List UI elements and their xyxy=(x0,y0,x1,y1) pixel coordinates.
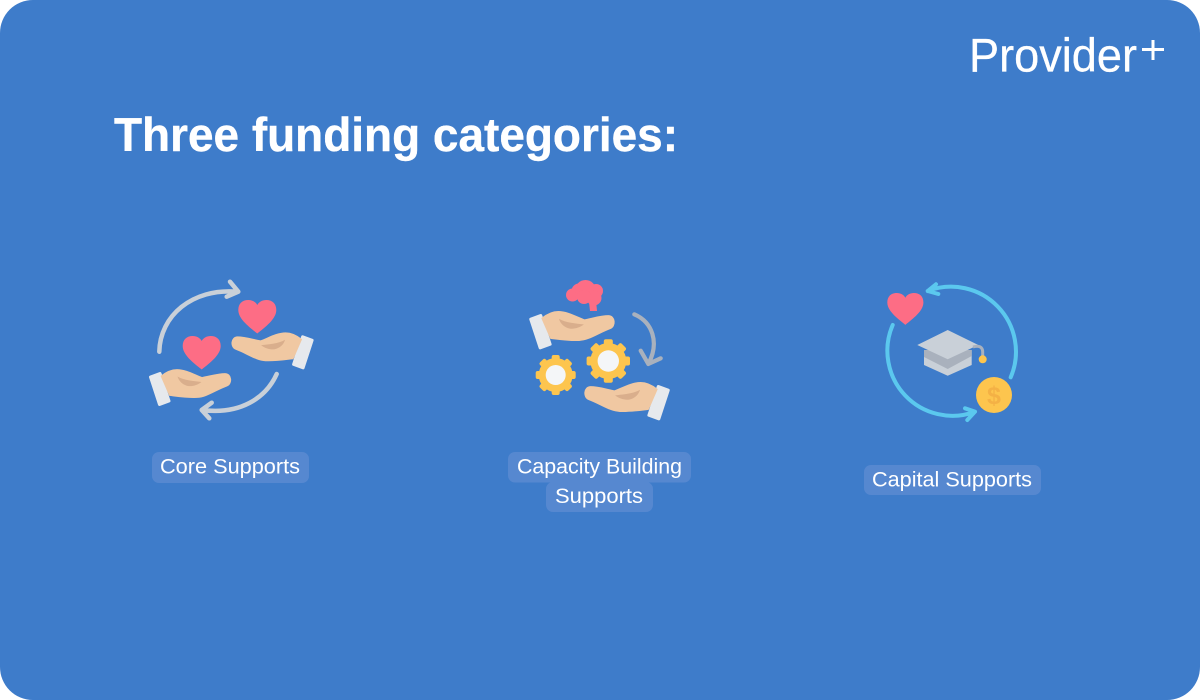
icon: capacity building, hands with brain and gears xyxy=(531,280,668,419)
icon: upper heart xyxy=(238,300,276,334)
icon: left gear xyxy=(536,355,576,395)
arrow: upper cycle arrow xyxy=(159,282,238,352)
icon: brain xyxy=(566,280,603,311)
arrow: curved arrow xyxy=(634,314,661,364)
icon: graduation cap xyxy=(917,330,987,376)
icon: dollar coin: $ xyxy=(987,382,1001,410)
icon: upper hand xyxy=(531,311,614,348)
label: Capacity Building Supports: Supports xyxy=(555,485,643,508)
label: Capacity Building Supports: Capacity Building xyxy=(517,455,682,478)
icon: core supports, hands exchanging hearts xyxy=(150,282,312,418)
label: Core Supports xyxy=(152,452,309,483)
title: Three funding categories: xyxy=(114,108,678,161)
icon: right hand xyxy=(232,333,312,368)
icon: right gear xyxy=(587,339,630,383)
icon: lower heart xyxy=(183,336,221,370)
icon: heart xyxy=(887,293,923,325)
icon: left hand xyxy=(150,370,231,404)
label: Capital Supports: Capital Supports xyxy=(872,468,1032,492)
arrow: upper cycle arrow xyxy=(928,284,1016,377)
label: Core Supports: Core Supports xyxy=(160,455,300,478)
arrow: lower cycle arrow xyxy=(202,374,277,418)
icon: lower hand xyxy=(585,382,668,419)
arrow: lower cycle arrow xyxy=(887,325,975,420)
logo: Provider+: Provider xyxy=(969,28,1137,82)
label: Capacity Building Supports xyxy=(508,452,691,512)
label: Capital Supports xyxy=(864,465,1041,495)
icon: capital supports, graduation cap, heart and coin cycle xyxy=(887,284,1016,420)
